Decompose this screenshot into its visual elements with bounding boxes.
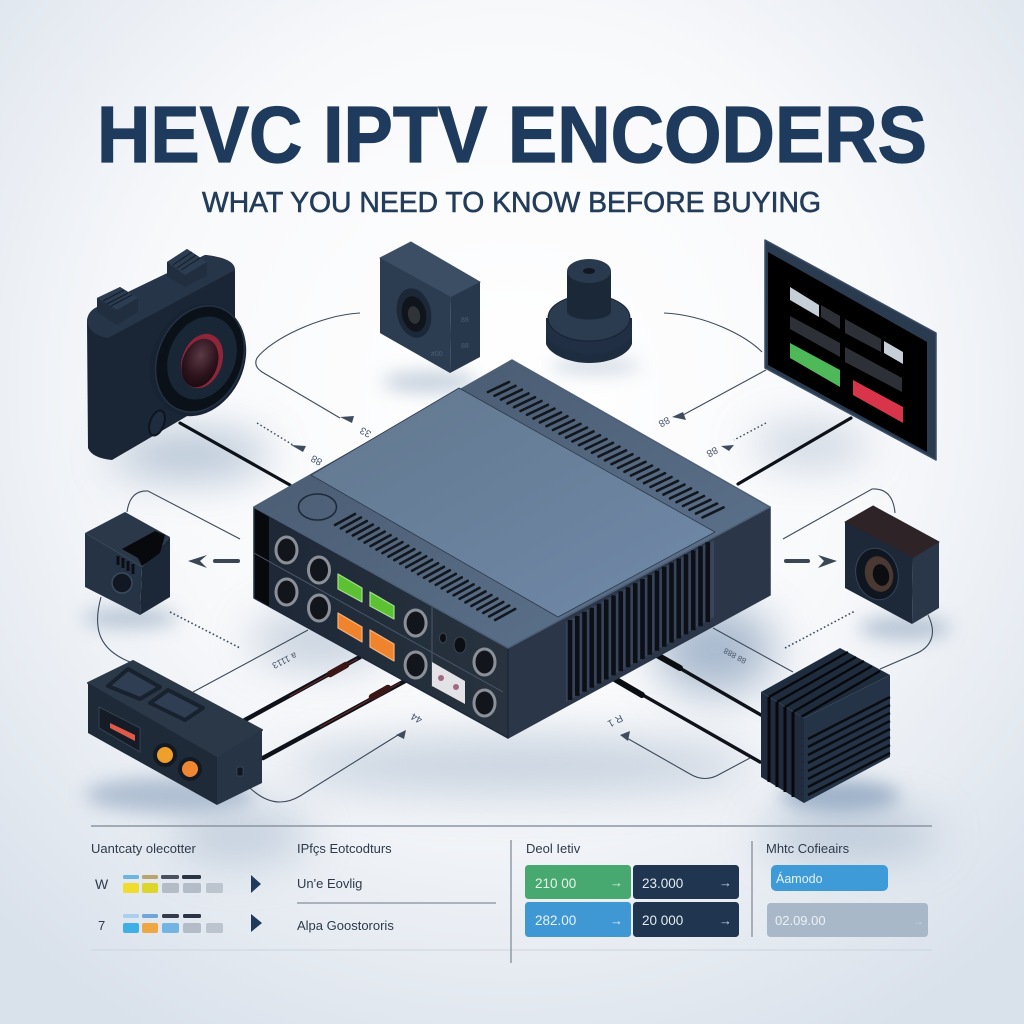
white connector block: [432, 662, 465, 704]
icon: heat sink: [761, 648, 890, 803]
control box display: [99, 707, 140, 752]
icon: cylindrical post: [546, 259, 632, 363]
callout micro labels: 88: [704, 444, 719, 459]
subtitle: WHAT YOU NEED TO KNOW BEFORE BUYING: [202, 187, 821, 219]
price tile: dark top: 23.000: [642, 876, 683, 891]
column 2: heading: IPfçs Eotcodturs: [297, 841, 392, 856]
blue pill button: [771, 865, 888, 891]
price tile: blue: [525, 902, 631, 937]
camera body: [87, 255, 235, 460]
small jacks: [440, 633, 466, 653]
front ports: [276, 537, 495, 716]
camera top face: [87, 255, 235, 338]
callout micro labels: 44: [409, 710, 424, 725]
small camera side: [140, 537, 170, 615]
small camera top: [85, 512, 170, 567]
price tile: dark top: →: [719, 875, 732, 890]
cables: [180, 418, 851, 762]
small camera grille: [118, 556, 133, 574]
square camera front: [380, 258, 451, 373]
square camera lens: [392, 285, 436, 341]
bottom panel: [91, 826, 932, 963]
control box port: [237, 767, 243, 776]
monitor screen: [768, 252, 927, 452]
blue pill button: Áamodo: [776, 871, 823, 886]
price tile: green: 210 00: [535, 876, 576, 891]
square camera side marks: [431, 317, 469, 358]
square camera side marks: 88: [461, 343, 469, 350]
orange buttons: [338, 613, 394, 661]
front panel details: [254, 509, 503, 692]
column 4: heading: Mhtc Cofieairs: [766, 841, 850, 856]
heat sink right: [804, 675, 890, 803]
price tile: blue: 282.00: [535, 913, 576, 928]
power button ring: [298, 494, 336, 520]
control box front: [88, 683, 217, 805]
camera lens: [132, 288, 264, 432]
callout micro labels: 88 888: [722, 646, 748, 665]
square camera side: [450, 282, 480, 373]
icon: square camera: [380, 242, 480, 373]
control box side: [217, 730, 262, 805]
price tile: dark bottom: [633, 902, 739, 937]
screen green block: [790, 343, 840, 387]
thick arrow right: [786, 555, 837, 568]
price tile: dark top: [633, 865, 739, 899]
column 2: second item: Alpa Goostororis: [297, 918, 394, 933]
control box top: [88, 661, 262, 757]
control box orange buttons: [153, 743, 202, 781]
callout micro labels: 88: [309, 452, 324, 467]
rules: [91, 825, 932, 827]
column 2: first item: Un'e Eovlig: [297, 876, 362, 891]
side vent grille: [566, 540, 714, 702]
icon: notched small camera: [85, 512, 170, 615]
small camera lens: [112, 573, 132, 593]
callout micro labels: a 1113: [271, 650, 299, 671]
callout arrows: [291, 412, 734, 741]
price tile: dark bottom: 20 000: [642, 913, 683, 928]
camera dial right: [167, 249, 207, 287]
post neck: [567, 271, 611, 320]
soft shadows on the ground: [82, 359, 951, 865]
post pin: [583, 268, 595, 274]
encoder front face: [254, 507, 508, 738]
column 1: heading: Uantcaty olecotter: [91, 841, 196, 856]
grey value box: 02.09.00: [775, 913, 826, 928]
lens cube lens: [850, 544, 904, 604]
lens cube top: [845, 506, 939, 558]
price tile: blue: →: [610, 913, 623, 928]
screen light blocks: [790, 287, 903, 364]
control box pads: [108, 669, 203, 720]
control box red indicator: [110, 723, 135, 741]
encoder right face: [508, 507, 770, 738]
column 1: row two: 7: [98, 918, 105, 933]
callout micro labels: [271, 414, 748, 729]
callout micro labels: 88: [656, 414, 671, 429]
top left vents: [335, 514, 515, 620]
heat sink left: [761, 692, 804, 803]
callout micro labels: 33: [358, 424, 373, 439]
column 3: heading: Deol Ietiv: [526, 841, 581, 856]
icon: control box: [88, 661, 262, 805]
grey value box: [767, 903, 928, 937]
screen red block: [853, 380, 903, 423]
post base: [546, 318, 632, 363]
square camera side marks: 88: [461, 317, 469, 324]
grey value box: →: [912, 914, 924, 928]
camera strap lug: [146, 408, 168, 438]
column 1: row one: [95, 875, 223, 893]
column 1: row one arrow: [251, 875, 261, 893]
square camera top: [380, 242, 480, 297]
encoder top centre panel: [311, 388, 715, 617]
icon: large camera: [87, 249, 264, 460]
heat sink top: [761, 648, 890, 718]
camera dial left: [97, 287, 138, 325]
top right vents: [488, 382, 724, 517]
thick arrow left: [188, 555, 238, 568]
title: HEVC IPTV ENCODERS: [97, 90, 927, 179]
lens cube front: [845, 522, 913, 624]
column 1: row two: [98, 914, 223, 933]
connector lines and callouts: [98, 313, 932, 802]
column 2: separator: [297, 902, 496, 904]
monitor frame: [765, 240, 936, 460]
callout micro labels: R 1: [605, 712, 624, 729]
lens cube side: [912, 542, 939, 624]
column 1: row one: W: [95, 876, 109, 892]
main encoder box: [254, 360, 770, 738]
screen dark blocks: [790, 305, 902, 392]
encoder top edge plate: [254, 360, 770, 648]
price tile: dark bottom: →: [719, 913, 732, 928]
column 1: row two arrow: [251, 914, 262, 932]
price tile: green: [525, 865, 631, 899]
green buttons: [338, 574, 394, 619]
icon: lens cube camera: [845, 506, 939, 624]
small camera front: [85, 533, 142, 615]
price tile: green: →: [610, 875, 623, 890]
icon: monitor: [765, 240, 936, 460]
small camera notch: [122, 531, 165, 566]
square camera side marks: #00: [431, 351, 443, 358]
